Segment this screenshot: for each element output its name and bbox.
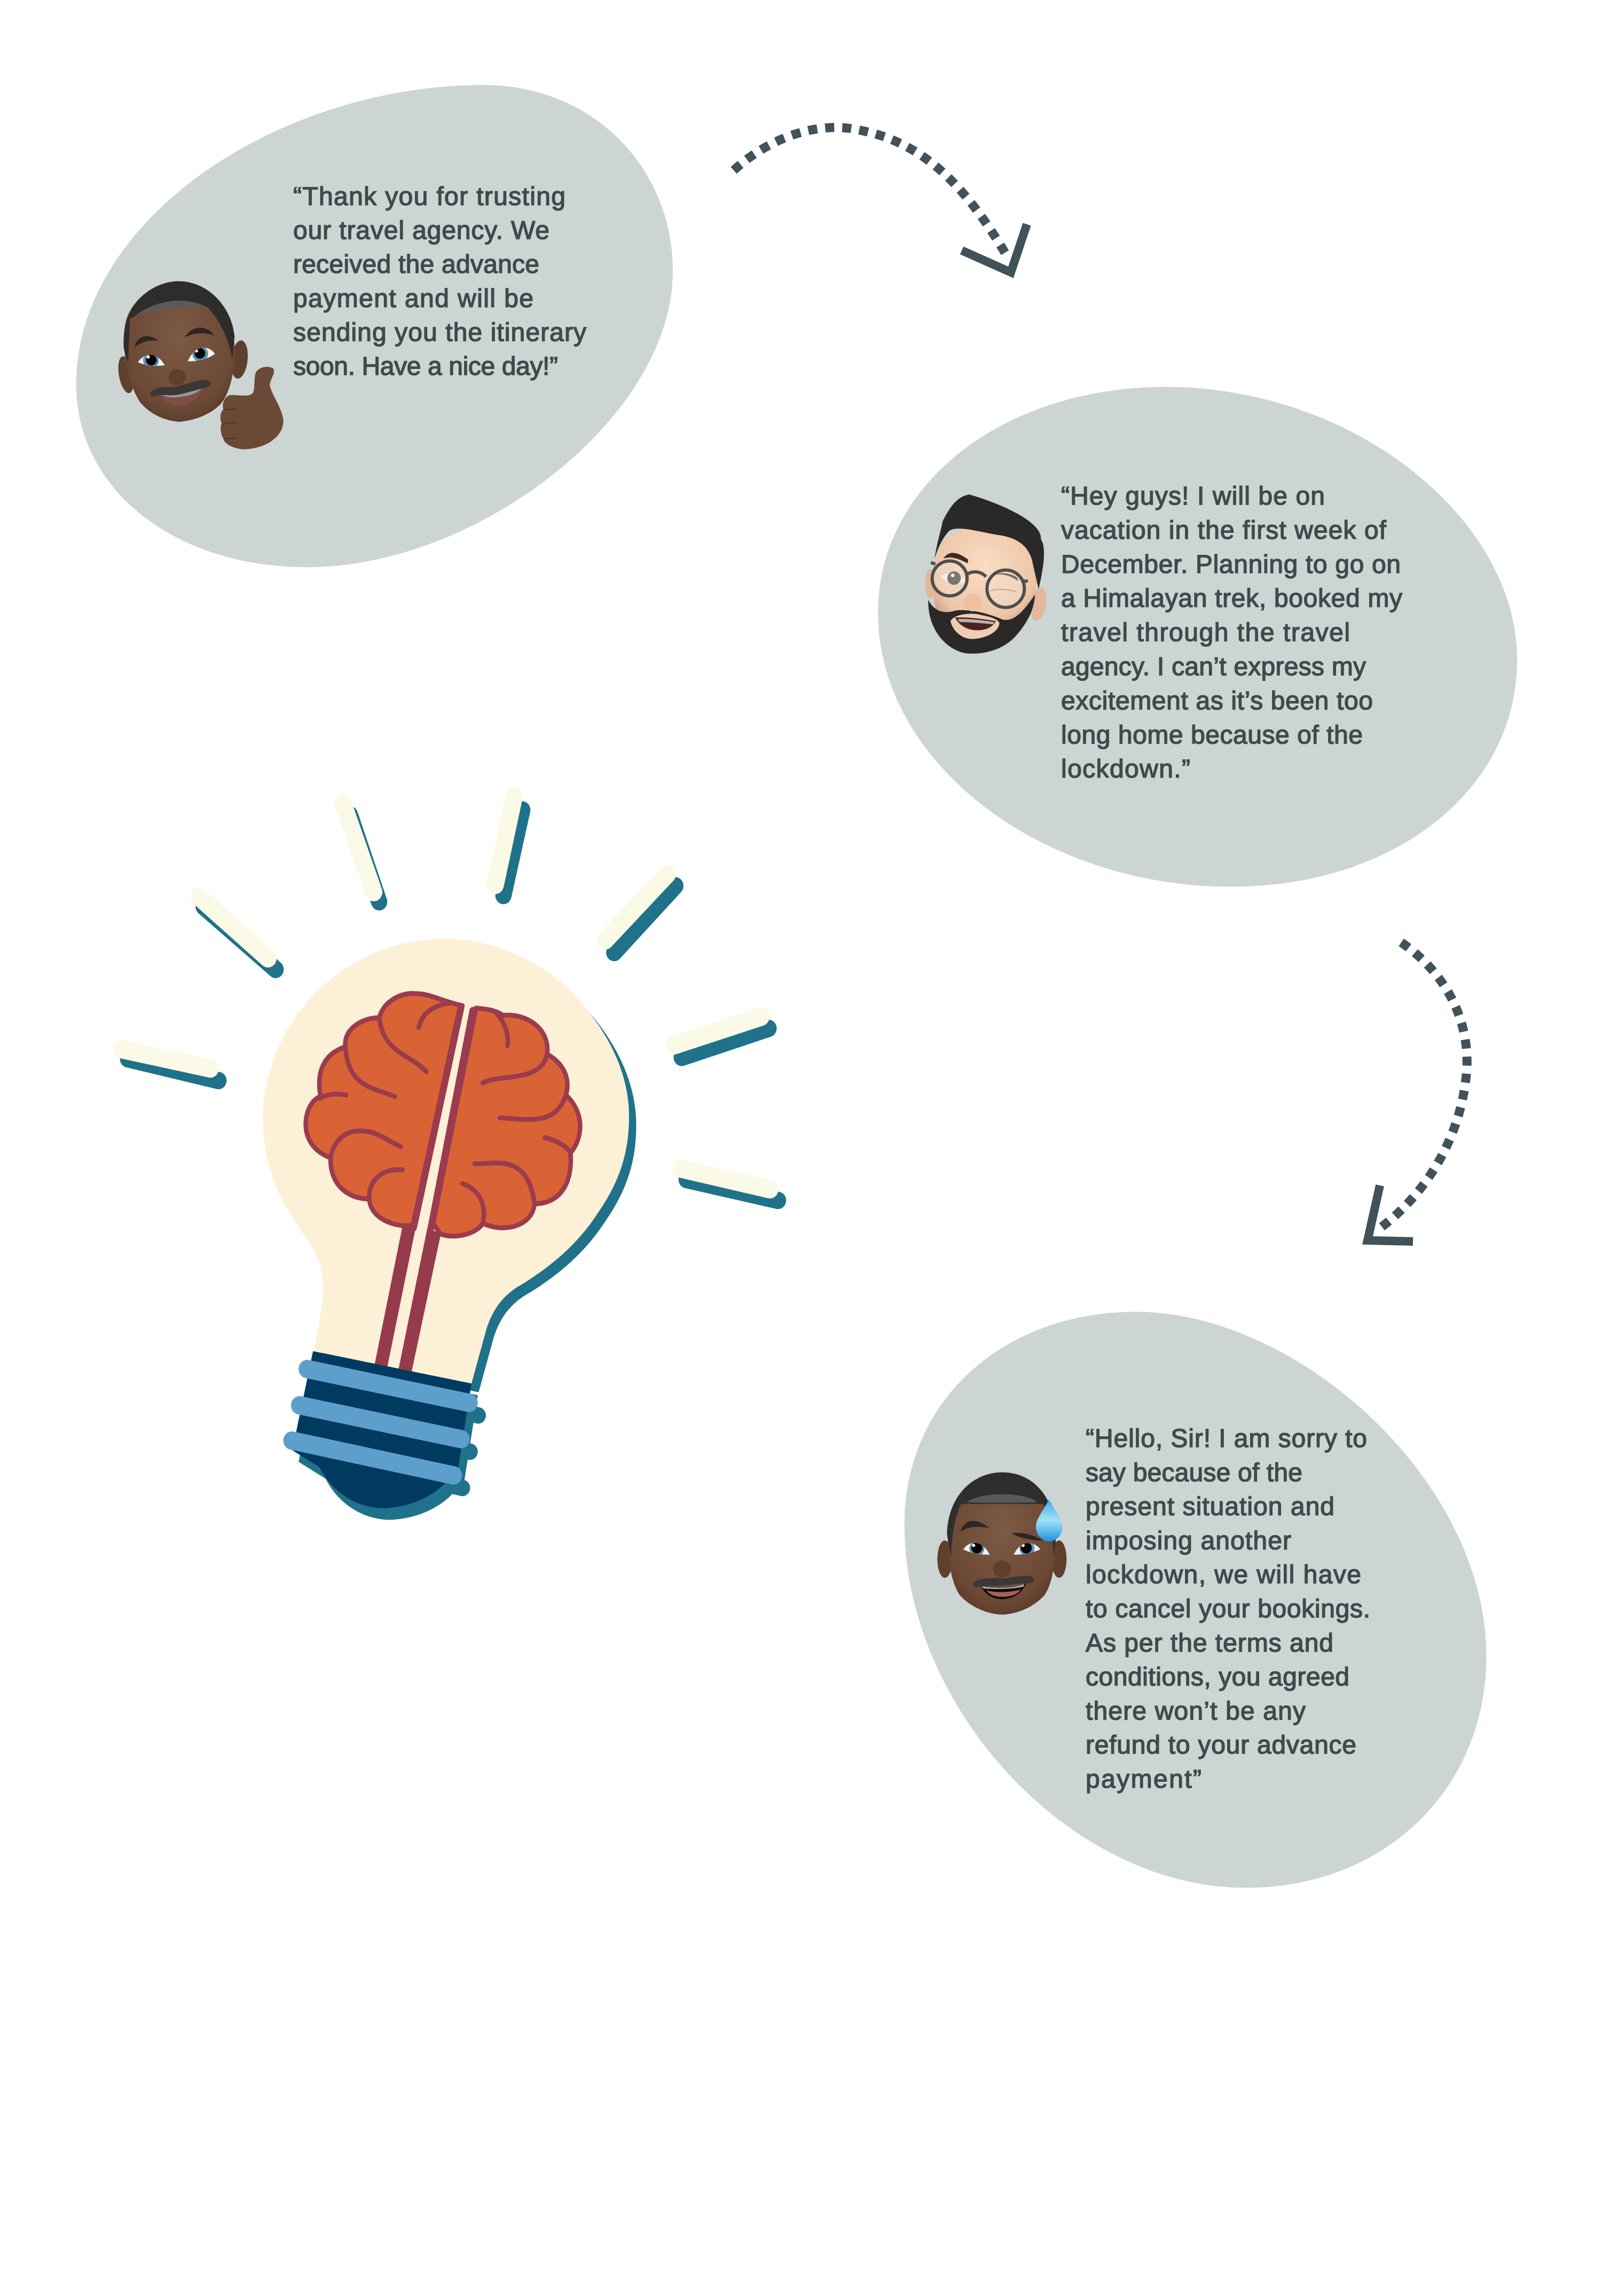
panel: travel agency message — [76, 85, 673, 567]
quote text: payment” — [1086, 1765, 1202, 1794]
brain — [306, 994, 580, 1236]
illustration: light bulb with brain — [121, 797, 778, 1520]
panel: agency cancellation message — [905, 1312, 1486, 1888]
panel: customer message — [878, 387, 1517, 887]
light rays — [121, 797, 778, 1200]
quote text: soon. Have a nice day!” — [293, 352, 558, 381]
quote text: December. Planning to go on — [1061, 551, 1401, 579]
quote text: payment and will be — [293, 285, 533, 313]
quote text: to cancel your bookings. — [1086, 1595, 1370, 1623]
quote text: travel through the travel — [1061, 619, 1350, 647]
speech bubble — [905, 1312, 1486, 1888]
quote text: lockdown.” — [1061, 755, 1190, 783]
brain stem — [375, 1225, 441, 1372]
icon: sweating agent memoji — [937, 1472, 1066, 1615]
quote text: conditions, you agreed — [1086, 1663, 1349, 1692]
quote text: “Thank you for trusting — [293, 183, 566, 211]
quote text: our travel agency. We — [293, 217, 549, 245]
quote text — [1086, 1425, 1370, 1794]
speech bubble — [76, 85, 673, 567]
quote text: say because of the — [1086, 1459, 1302, 1487]
quote text: excitement as it’s been too — [1061, 687, 1373, 715]
quote text: agency. I can’t express my — [1061, 652, 1366, 681]
quote text: a Himalayan trek, booked my — [1061, 585, 1402, 613]
quote text: refund to your advance — [1086, 1731, 1356, 1759]
bulb base — [292, 1351, 478, 1520]
quote text: imposing another — [1086, 1527, 1291, 1555]
quote text: long home because of the — [1061, 721, 1363, 749]
quote text: received the advance — [293, 250, 539, 279]
quote text: “Hello, Sir! I am sorry to — [1086, 1425, 1367, 1453]
quote text: As per the terms and — [1086, 1629, 1333, 1657]
quote text: “Hey guys! I will be on — [1061, 482, 1325, 510]
quote text: present situation and — [1086, 1493, 1334, 1521]
quote text: vacation in the first week of — [1061, 516, 1387, 545]
quote text — [293, 183, 586, 381]
bulb shadow — [270, 948, 636, 1392]
arrow: curved dotted arrow to agency reply — [1368, 942, 1467, 1241]
quote text: there won’t be any — [1086, 1697, 1306, 1725]
quote text — [1061, 482, 1402, 783]
bulb glass — [263, 939, 629, 1383]
quote text: sending you the itinerary — [293, 318, 586, 347]
arrow: curved dotted arrow to customer message — [734, 128, 1027, 272]
quote text: lockdown, we will have — [1086, 1561, 1361, 1589]
icon: winking bearded man memoji — [925, 494, 1049, 654]
speech bubble — [878, 387, 1517, 887]
icon: smiling agent memoji with thumbs up — [116, 281, 284, 450]
